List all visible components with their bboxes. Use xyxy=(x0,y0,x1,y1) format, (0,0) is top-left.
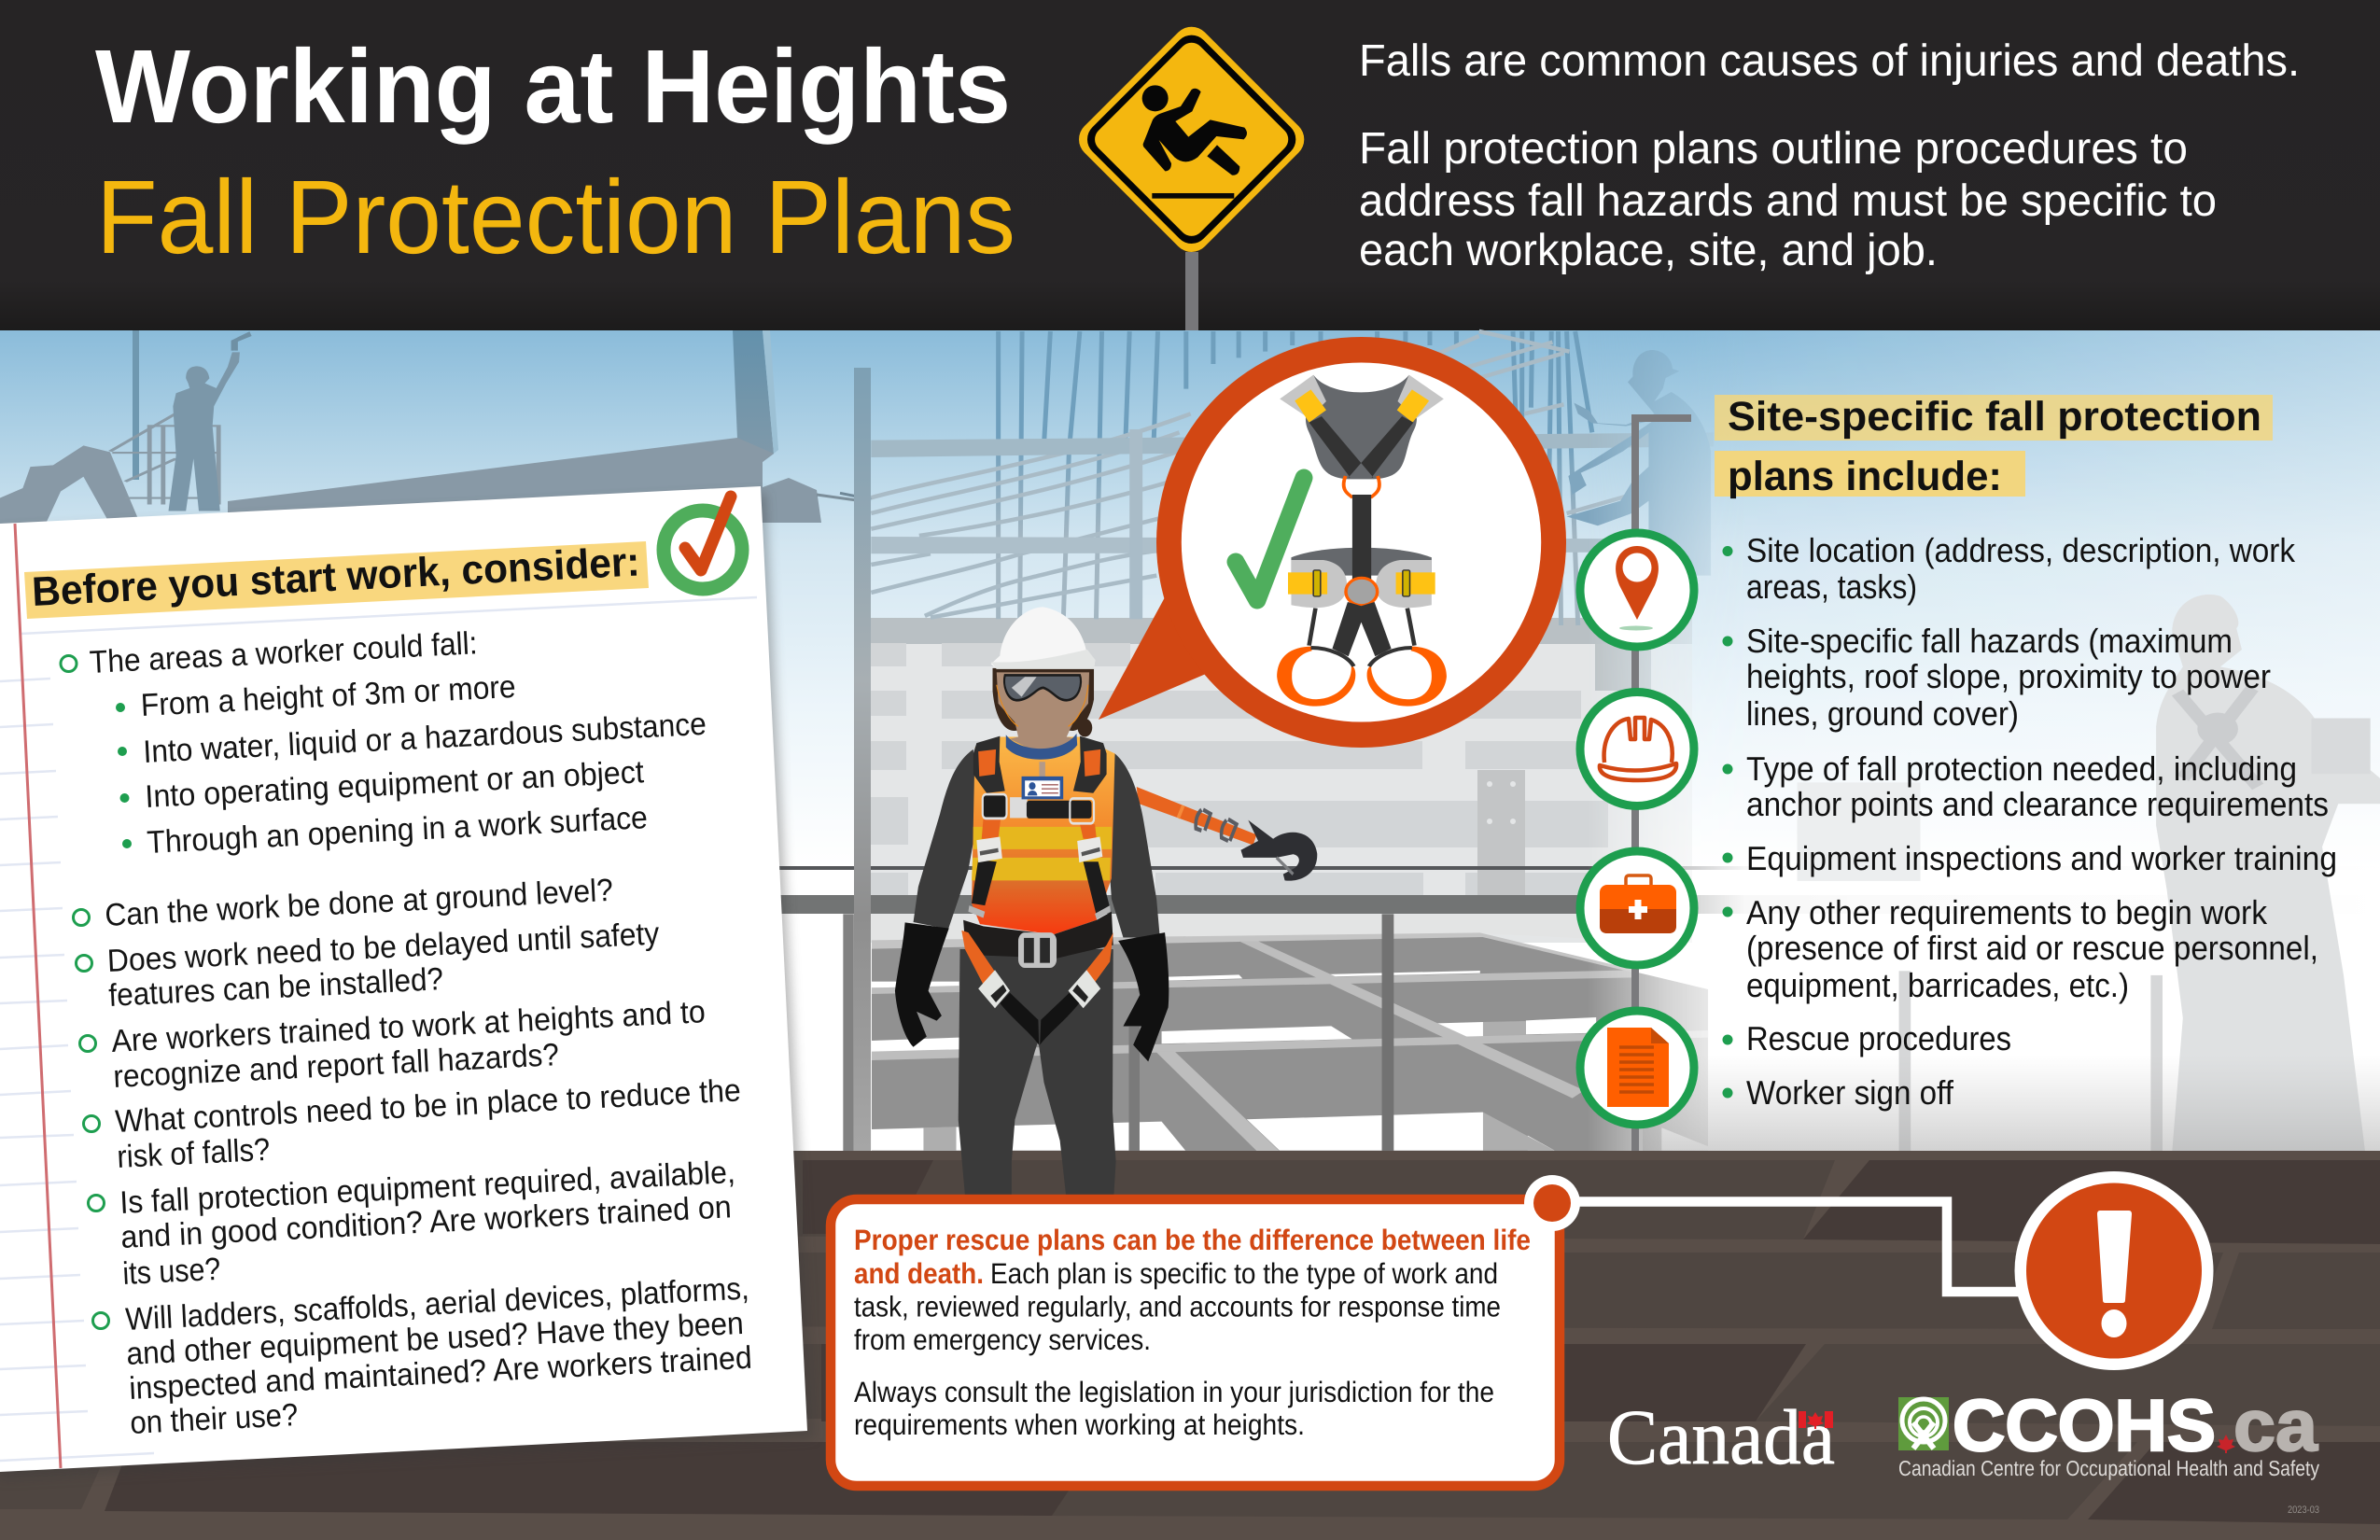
header subtitle: Fall Protection Plans xyxy=(96,159,1015,275)
site-specific plan list: anchor points and clearance requirements xyxy=(1746,785,2329,823)
worker ID badge xyxy=(1022,762,1063,799)
icon: hard hat xyxy=(1580,693,1694,806)
checklist text: Into water, liquid or a hazardous substance xyxy=(142,707,707,770)
header title: Working at Heights xyxy=(95,28,1011,145)
worker legs xyxy=(959,949,1116,1195)
icon: document xyxy=(1580,1011,1694,1125)
checklist text: Is fall protection equipment required, available, xyxy=(119,1155,736,1221)
site-specific plan list: areas, tasks) xyxy=(1746,567,1917,606)
logo: CCOHS.ca: ca xyxy=(2233,1384,2318,1466)
checklist text: risk of falls? xyxy=(116,1132,271,1175)
header intro text xyxy=(1359,36,2300,275)
checklist text: recognize and report fall hazards? xyxy=(112,1037,560,1095)
background: wire grid and scaffold xyxy=(840,331,1714,625)
site-specific plan list: (presence of first aid or rescue personnel, xyxy=(1746,929,2318,967)
lanyard with hook xyxy=(1137,787,1317,881)
site-specific plan list: Any other requirements to begin work xyxy=(1746,893,2268,931)
header band xyxy=(0,0,2380,330)
worker arms xyxy=(914,749,1160,937)
checklist text: its use? xyxy=(121,1252,221,1292)
checklist text: on their use? xyxy=(129,1397,299,1441)
harness illustration xyxy=(1277,375,1447,707)
checklist text: What controls need to be in place to reduce the xyxy=(114,1072,742,1140)
site-specific plan list xyxy=(1723,531,2337,1112)
callout text: Proper rescue plans can be the difference between life xyxy=(854,1224,1531,1256)
site-specific heading text: Site-specific fall protection xyxy=(1728,394,2261,440)
logo: CCOHS.ca xyxy=(1898,1384,2319,1480)
checklist text: The areas a worker could fall: xyxy=(89,625,478,680)
callout text: task, reviewed regularly, and accounts for response time xyxy=(854,1290,1501,1323)
background: ghost worker silhouette xyxy=(1798,595,2380,1151)
floor xyxy=(0,1151,2380,1540)
date code: 2023-03 xyxy=(2288,1505,2319,1516)
site-specific plan list: Type of fall protection needed, including xyxy=(1746,749,2297,788)
background: sky xyxy=(0,330,2380,1152)
site-specific heading text xyxy=(1728,394,2261,499)
header intro text: Falls are common causes of injuries and deaths. xyxy=(1359,36,2300,86)
callout text: Each plan is specific to the type of work and xyxy=(990,1257,1498,1290)
background: building blocks xyxy=(871,618,1692,943)
site-specific plan list: Site location (address, description, work xyxy=(1746,531,2296,569)
header intro text: address fall hazards and must be specific to xyxy=(1359,176,2217,226)
checklist text: Will ladders, scaffolds, aerial devices, platforms, xyxy=(124,1271,750,1337)
checklist text: Are workers trained to work at heights and to xyxy=(110,994,707,1059)
icon: first aid kit xyxy=(1580,851,1694,965)
worker in harness xyxy=(895,607,1169,1195)
logo: CCOHS.ca: CCOHS xyxy=(1953,1384,2216,1466)
checklist text: Can the work be done at ground level? xyxy=(104,873,614,933)
icon: exclamation mark xyxy=(2014,1171,2214,1370)
logo: Canada wordmark: Canada xyxy=(1607,1394,1835,1481)
checklist text: Does work need to be delayed until safety xyxy=(106,916,660,979)
panel: rescue plan callout xyxy=(831,1175,1580,1486)
connector line xyxy=(1577,1202,2025,1292)
worker gloves xyxy=(895,922,1169,1061)
header intro text: each workplace, site, and job. xyxy=(1359,226,1938,275)
background: distant worker silhouette xyxy=(1567,350,1711,576)
background: lower grey fade xyxy=(1643,1055,2380,1151)
worker head xyxy=(991,607,1095,760)
site-specific heading highlight xyxy=(1715,394,2273,499)
callout text: requirements when working at heights. xyxy=(854,1408,1305,1441)
speech bubble: harness close-up xyxy=(1099,337,1566,748)
checklist text: inspected and maintained? Are workers trained xyxy=(128,1340,753,1407)
callout text: from emergency services. xyxy=(854,1323,1151,1356)
callout text: Always consult the legislation in your jurisdiction for the xyxy=(854,1376,1494,1408)
green check mark xyxy=(1236,478,1304,600)
checklist text: and other equipment be used? Have they been xyxy=(125,1306,745,1372)
worker harness straps xyxy=(961,736,1113,1045)
site plan connecting line xyxy=(1635,418,1691,1151)
callout node xyxy=(1524,1175,1580,1231)
background: guard rails xyxy=(775,866,2380,914)
callout text xyxy=(854,1224,1531,1441)
site-specific plan list: Site-specific fall hazards (maximum xyxy=(1746,622,2233,660)
background: deck xyxy=(843,914,1708,1151)
header sign pole xyxy=(1185,252,1198,330)
site-specific plan list: Rescue procedures xyxy=(1746,1019,2011,1057)
background: vertical post xyxy=(854,368,871,1151)
checklist text: Into operating equipment or an object xyxy=(144,754,645,815)
checklist text: From a height of 3m or more xyxy=(140,669,516,723)
panel: before you start work checklist paper xyxy=(0,486,814,1479)
header intro text: Fall protection plans outline procedures to xyxy=(1359,124,2188,174)
checklist bullet markers xyxy=(61,655,132,1329)
icon: green circle with red check xyxy=(664,497,742,589)
icon: location pin xyxy=(1580,533,1694,647)
checklist heading highlight xyxy=(24,541,649,619)
header title xyxy=(95,28,1015,275)
site-specific heading text: plans include: xyxy=(1728,454,2002,499)
checklist text xyxy=(89,625,753,1441)
checklist text: Through an opening in a work surface xyxy=(146,800,649,861)
site-specific plan list: Worker sign off xyxy=(1746,1073,1954,1112)
site-specific plan list: heights, roof slope, proximity to power xyxy=(1746,657,2271,695)
checklist text: features can be installed? xyxy=(107,961,444,1014)
checklist heading: Before you start work, consider: xyxy=(31,539,641,615)
site-specific plan list: equipment, barricades, etc.) xyxy=(1746,966,2129,1004)
icon: falling person warning sign xyxy=(1071,19,1312,259)
site-specific plan list: lines, ground cover) xyxy=(1746,694,2019,733)
site-specific plan list: Equipment inspections and worker training xyxy=(1746,839,2337,877)
worker safety vest xyxy=(972,736,1115,934)
callout text: and death. xyxy=(854,1257,984,1290)
checklist text: and in good condition? Are workers trained on xyxy=(119,1189,733,1255)
background: fade behind list xyxy=(1568,330,2380,1152)
background: silhouette of painter and crane xyxy=(0,330,870,525)
